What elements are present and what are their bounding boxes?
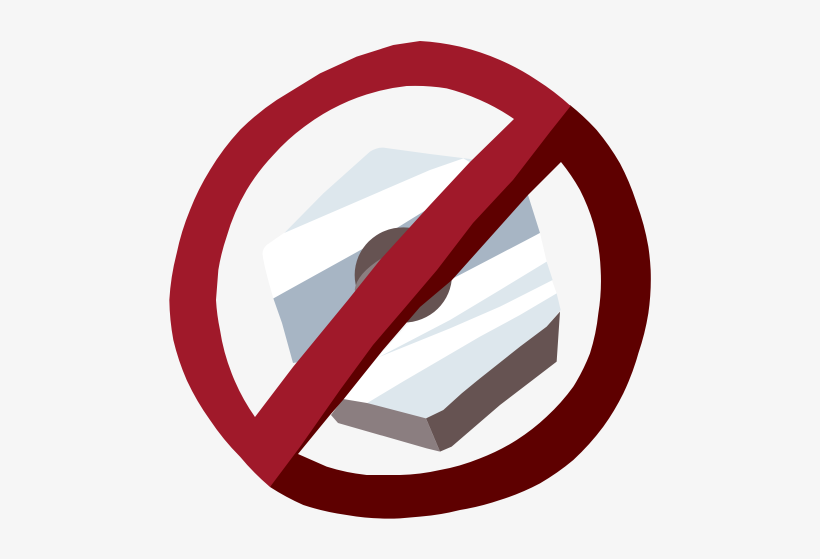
nut lower light facet — [367, 293, 561, 418]
nut top light facet — [283, 148, 483, 234]
nut thin light stripe — [378, 262, 553, 357]
prohibition ring bright part and diagonal bar — [169, 41, 571, 487]
prohibition ring dark part — [270, 105, 651, 519]
nut center hole — [355, 227, 452, 323]
nut lower white band — [343, 233, 557, 404]
nut brown side — [426, 312, 560, 452]
nut gray side — [331, 399, 440, 452]
icon: hex nut — [263, 148, 561, 452]
nut blue-gray face — [273, 173, 540, 363]
nut hole inner crescent — [355, 253, 393, 297]
nut upper white band — [263, 158, 483, 298]
